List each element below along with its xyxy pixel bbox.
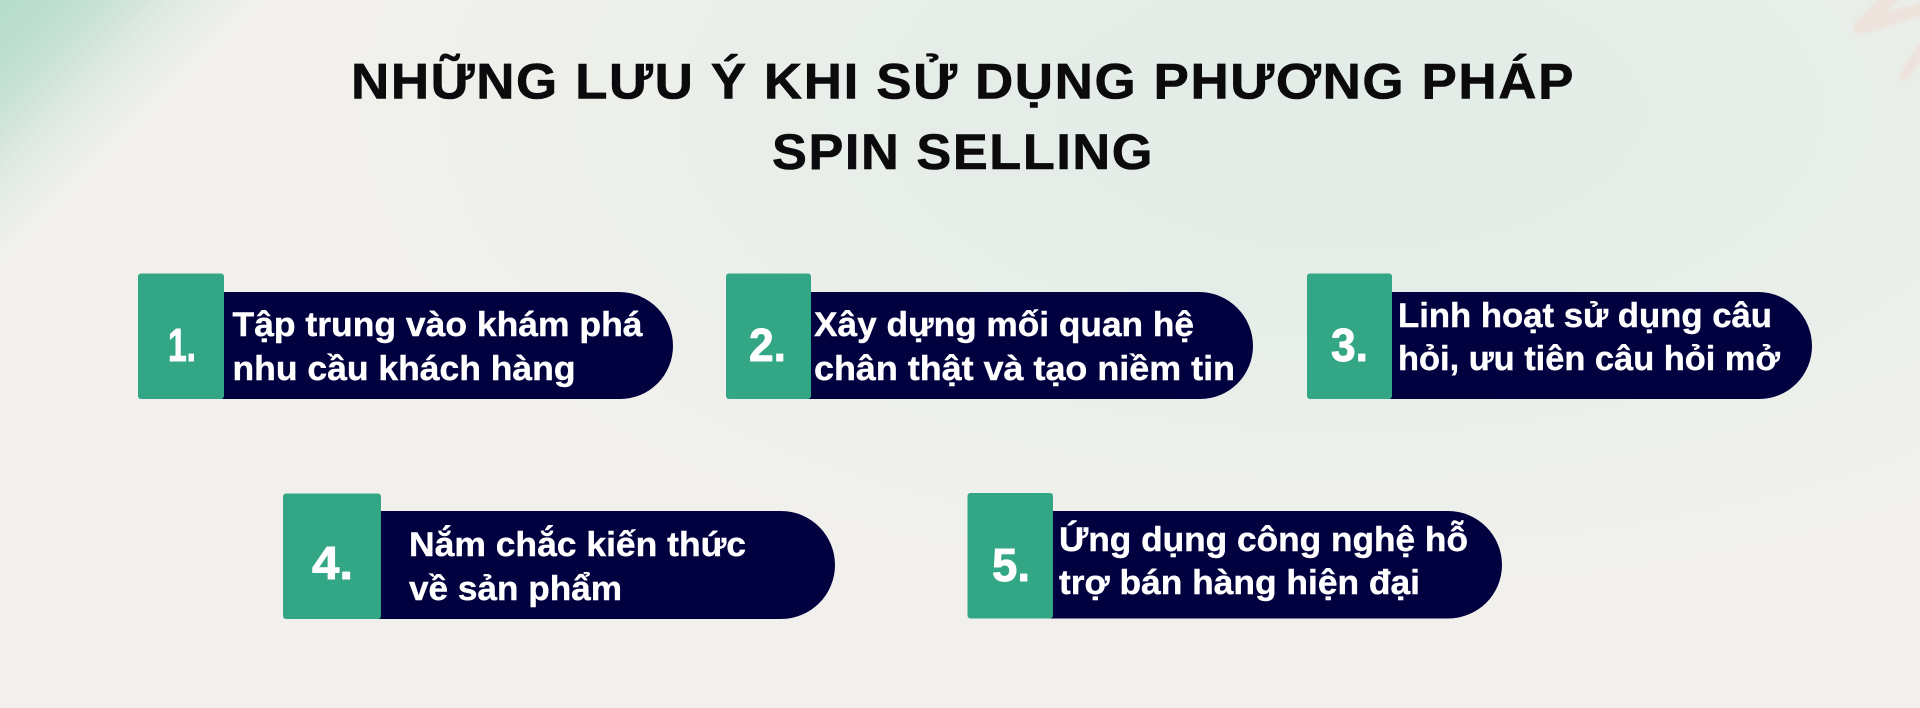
text 4	[409, 526, 746, 608]
card 3	[1307, 274, 1812, 399]
number 2: 2.	[749, 319, 786, 371]
title	[351, 52, 1575, 180]
pill 2	[790, 292, 1253, 399]
text 2: chân thật và tạo niềm tin	[814, 350, 1235, 388]
number tab 4	[283, 494, 381, 619]
text 1: nhu cầu khách hàng	[232, 350, 576, 388]
card 1	[138, 274, 673, 399]
text 4: về sản phẩm	[409, 570, 622, 608]
text 5	[1059, 521, 1468, 602]
text 1: Tập trung vào khám phá	[232, 306, 643, 344]
card 2	[726, 274, 1253, 399]
number tab 2	[726, 274, 811, 399]
card 4	[283, 494, 835, 619]
number tab 3	[1307, 274, 1392, 399]
title: NHỮNG LƯU Ý KHI SỬ DỤNG PHƯƠNG PHÁP	[351, 52, 1575, 110]
text 2	[814, 306, 1235, 388]
number 3: 3.	[1331, 319, 1368, 371]
text 1	[232, 306, 643, 388]
text 2: Xây dựng mối quan hệ	[814, 306, 1194, 344]
text 3: Linh hoạt sử dụng câu	[1398, 297, 1772, 335]
title: SPIN SELLING	[772, 124, 1154, 180]
number 4: 4.	[312, 537, 353, 589]
number tab 5	[968, 493, 1053, 618]
pill 4	[360, 511, 835, 619]
pill 5	[1030, 511, 1502, 618]
pill 3	[1370, 292, 1812, 399]
decorative pink strokes top right	[1861, 0, 1920, 76]
text 5: Ứng dụng công nghệ hỗ	[1059, 521, 1468, 559]
number 5: 5.	[992, 539, 1030, 591]
text 4: Nắm chắc kiến thức	[409, 526, 746, 564]
card 5	[968, 493, 1502, 618]
number tab 1	[138, 274, 224, 399]
text 3: hỏi, ưu tiên câu hỏi mở	[1398, 340, 1781, 378]
pill 1	[200, 292, 673, 399]
number 1: 1.	[168, 319, 196, 371]
text 5: trợ bán hàng hiện đại	[1059, 564, 1420, 602]
text 3	[1398, 297, 1781, 378]
